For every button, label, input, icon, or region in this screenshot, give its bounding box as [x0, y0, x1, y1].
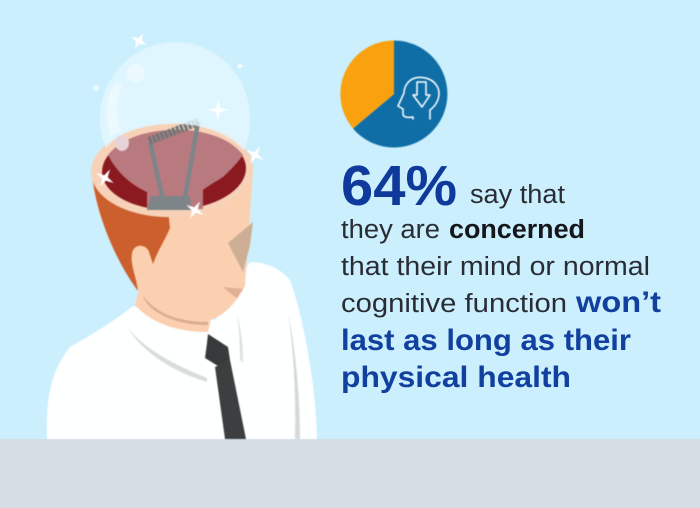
- word: concerned: concerned: [449, 216, 585, 244]
- hair: [92, 165, 170, 291]
- word: won’t: won’t: [575, 286, 661, 319]
- pie slice 64 percent: [353, 40, 447, 147]
- neck shadow: [143, 296, 208, 325]
- neck: [135, 293, 215, 332]
- icon: head with down arrow: [398, 77, 439, 119]
- line: physical health: physical health: [341, 361, 571, 394]
- floor band: [0, 439, 700, 508]
- pie slice 36 percent: [340, 40, 394, 128]
- glass bulb: [100, 42, 250, 151]
- tie: [205, 334, 246, 439]
- bulb filament: [147, 122, 198, 210]
- mouth shadow: [223, 287, 243, 298]
- pie chart: 64 percent with head icon: [340, 40, 448, 148]
- sparkles: [91, 29, 269, 224]
- open skull rim: [89, 120, 255, 220]
- line: that their mind or normal: that their mind or normal: [341, 253, 650, 281]
- face shadow: [228, 222, 253, 272]
- stat: 64%: 64%: [341, 154, 457, 218]
- line: they are: they are: [341, 216, 440, 244]
- skull interior: [101, 128, 247, 212]
- line: cognitive function: cognitive function: [341, 290, 567, 318]
- line: say that: say that: [470, 181, 565, 209]
- shirt: [47, 262, 317, 439]
- line: last as long as their: last as long as their: [341, 324, 631, 357]
- head: [92, 165, 253, 325]
